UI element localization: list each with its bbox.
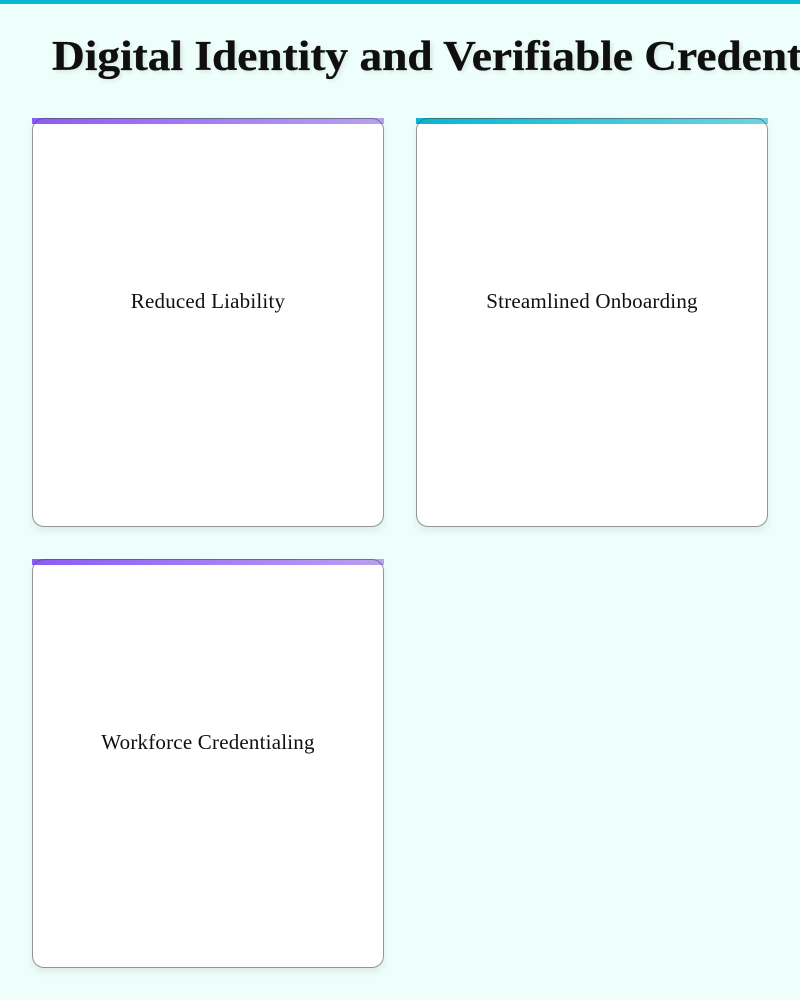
top accent bar [0, 0, 800, 4]
panel outline [416, 118, 768, 527]
panel label: Reduced Liability: Reduced Liability [131, 289, 285, 313]
panel accent bar: purple [32, 559, 384, 565]
panel outline [32, 559, 384, 968]
panel label: Streamlined Onboarding: Streamlined Onboarding [486, 289, 698, 313]
panel label: Workforce Credentialing: Workforce Credentialing [101, 730, 315, 754]
panel: Streamlined Onboarding [416, 118, 768, 527]
panel accent bar: purple [32, 118, 384, 124]
panel: Reduced Liability [32, 118, 384, 527]
panel: Workforce Credentialing [32, 559, 384, 968]
panel accent bar: cyan [416, 118, 768, 124]
panel outline [32, 118, 384, 527]
